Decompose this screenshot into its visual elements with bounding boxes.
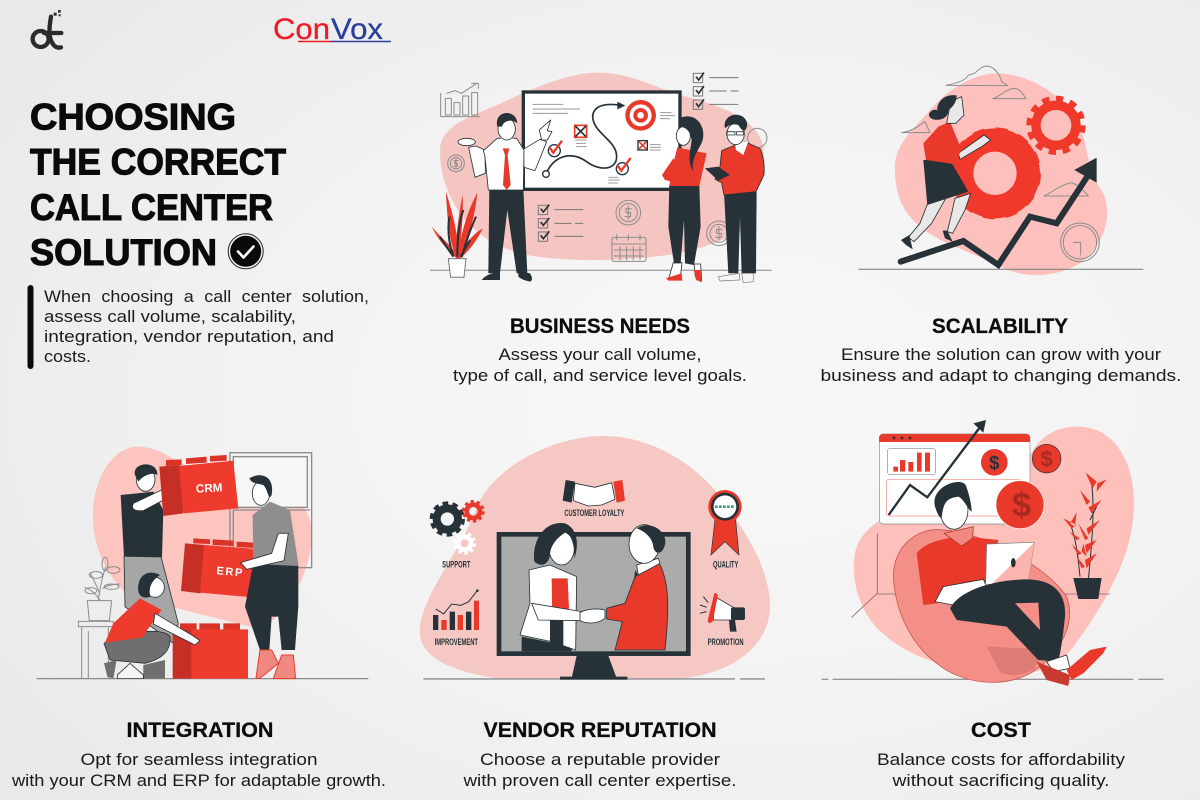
businessman (580, 525, 668, 650)
growth arrow (889, 425, 982, 515)
illustration: scalability (858, 66, 1143, 275)
illustration: business needs (430, 73, 772, 283)
support label: SUPPORT (442, 560, 471, 570)
section text: scalability: business and adapt to changing demands. (820, 367, 1182, 385)
line chart panel (887, 479, 1020, 516)
coin large: $ (1012, 487, 1031, 525)
large gear (954, 132, 1036, 215)
section text: vendor reputation (462, 719, 736, 790)
beanbag (893, 530, 1070, 682)
illustration: integration (37, 447, 368, 679)
potted plant (78, 557, 120, 679)
start point (543, 171, 549, 177)
wall lines (852, 533, 1110, 617)
title: SOLUTION (30, 231, 217, 273)
mini bar chart (441, 83, 480, 117)
check markers (548, 141, 631, 175)
section text: cost (877, 719, 1126, 790)
crouching woman (104, 573, 200, 679)
standing man left (121, 464, 178, 643)
plant (1063, 473, 1107, 599)
section text: vendor reputation: VENDOR REPUTATION (484, 719, 716, 742)
quality label: QUALITY (713, 560, 738, 570)
coin left (448, 155, 464, 172)
floor line (423, 677, 765, 681)
plant (432, 192, 483, 277)
section text: cost: without sacrificing quality. (891, 772, 1110, 790)
section text: business needs: Assess your call volume, (498, 346, 702, 364)
improvement label: IMPROVEMENT (435, 637, 478, 647)
calendar (612, 235, 646, 261)
section text: integration: with your CRM and ERP for adaptable growth. (11, 772, 386, 790)
small gear (1030, 99, 1082, 151)
arrowhead (1074, 158, 1097, 183)
bottom block (173, 623, 248, 679)
floor line (430, 269, 772, 272)
section text: business needs: BUSINESS NEEDS (510, 315, 690, 338)
intro accent bar (28, 285, 34, 369)
board text lines (533, 104, 675, 183)
quality ribbon (708, 490, 742, 555)
ERP block (181, 538, 260, 598)
pink blob (895, 73, 1107, 275)
growth arrow (901, 175, 1088, 265)
coin large (996, 481, 1044, 529)
section text: vendor reputation: with proven call center expertise. (462, 772, 736, 790)
dashboard window (879, 434, 1030, 524)
title: CALL CENTER (30, 186, 273, 228)
pink blob (854, 427, 1134, 674)
path to target (546, 104, 622, 174)
standing man right (241, 475, 299, 679)
customer loyalty label: CUSTOMER LOYALTY (564, 508, 624, 518)
logo: dt mark (33, 10, 61, 48)
CRM block (159, 455, 238, 516)
intro text (44, 288, 369, 366)
ERP block: ERP (216, 565, 245, 580)
clock (1061, 223, 1099, 262)
mini bar chart (888, 449, 935, 474)
checklist top (693, 73, 738, 109)
intro text: costs. (44, 348, 91, 366)
intro text: assess call volume, scalability, (44, 308, 296, 326)
section text: business needs: type of call, and service level goals. (453, 367, 747, 385)
arrowhead (973, 420, 986, 433)
illustration: cost (822, 420, 1163, 686)
handshake icon (563, 480, 625, 506)
floor line (37, 677, 368, 681)
floor lines (822, 678, 1163, 681)
monitor (499, 534, 688, 680)
section text: cost: COST (971, 719, 1031, 742)
coin centre (616, 200, 641, 225)
title (30, 96, 286, 273)
logo: ConVox (273, 13, 391, 46)
cross markers (575, 125, 647, 150)
clouds (902, 66, 1088, 196)
pink blob (440, 73, 764, 260)
floor line (858, 268, 1143, 271)
logo: ConVox: Con (273, 13, 330, 46)
promotion label: PROMOTION (708, 637, 744, 647)
section text: integration: Opt for seamless integration (80, 751, 318, 769)
presenter (458, 113, 552, 282)
intro text: When choosing a call center solution, (44, 288, 369, 306)
section text: scalability: SCALABILITY (932, 315, 1068, 338)
arrowhead (617, 102, 625, 109)
section text: integration (11, 719, 386, 790)
section text: scalability (820, 315, 1182, 385)
coin small (981, 449, 1008, 476)
coin top right (1032, 444, 1061, 473)
improvement chart (433, 589, 479, 630)
beanbag shade (987, 640, 1050, 675)
CRM block: CRM (196, 481, 223, 496)
target (625, 100, 656, 131)
seated man (917, 482, 1107, 686)
intro text: integration, vendor reputation, and (44, 328, 334, 346)
coin top right: $ (1041, 447, 1053, 472)
pink blob (420, 436, 770, 678)
businesswoman (520, 523, 582, 651)
checklist bottom (538, 205, 583, 241)
title: THE CORRECT (30, 140, 286, 182)
illustration: vendor reputation (420, 436, 770, 680)
coin right (707, 221, 731, 246)
section text: cost: Balance costs for affordability (877, 751, 1126, 769)
icon: check badge (228, 234, 263, 269)
presentation board (523, 92, 680, 189)
logo: ConVox: Vox (331, 13, 383, 46)
gears icon (432, 502, 483, 553)
climbing woman (901, 95, 991, 249)
title: CHOOSING (30, 96, 236, 138)
section text: scalability: Ensure the solution can grow with your (841, 346, 1162, 364)
woman (662, 116, 707, 282)
section text: vendor reputation: Choose a reputable provider (480, 751, 721, 769)
section text: integration: INTEGRATION (126, 719, 274, 742)
coin small: $ (989, 452, 1000, 473)
man with tablet (705, 115, 767, 283)
megaphone (700, 593, 745, 632)
section text: business needs (453, 315, 747, 385)
pink blob (93, 447, 312, 627)
window (230, 453, 312, 568)
